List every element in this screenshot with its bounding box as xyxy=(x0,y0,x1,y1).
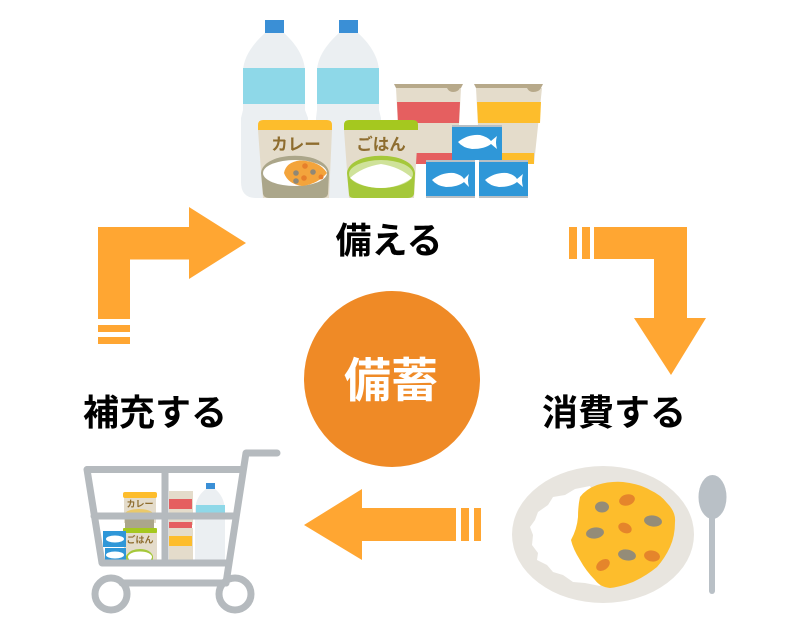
arrow: consume to replenish xyxy=(304,489,481,560)
icon: cup noodle red xyxy=(394,84,463,164)
label: curry: カレー xyxy=(271,135,321,154)
arrow: prepare to consume xyxy=(569,227,706,375)
icon: curry ingredients xyxy=(585,493,663,573)
icon: curry xyxy=(571,482,675,588)
icon: cart contents xyxy=(103,483,225,562)
heading: prepare: 備える xyxy=(336,220,442,261)
heading: replenish: 補充する xyxy=(83,392,227,433)
icon: water bottle right xyxy=(316,20,381,198)
illustration: shopping cart xyxy=(87,453,277,610)
illustration: emergency food and water xyxy=(241,20,543,198)
label: rice small: ごはん xyxy=(126,534,154,545)
label: stockpile: 備蓄 xyxy=(344,354,438,407)
icon: rice xyxy=(530,486,625,586)
icon: cart frame xyxy=(87,453,277,610)
heading: consume: 消費する xyxy=(542,392,686,433)
label: rice: ごはん xyxy=(356,134,406,154)
illustration: curry plate and spoon xyxy=(512,466,726,603)
icon: curry pack xyxy=(258,120,332,198)
center circle xyxy=(304,291,480,467)
arrow: replenish to prepare xyxy=(98,207,246,344)
icon: spoon xyxy=(698,475,726,594)
label: curry small: カレー xyxy=(126,499,154,509)
icon: water bottle left xyxy=(241,20,308,198)
icon: cup noodle yellow xyxy=(474,84,543,164)
icon: plate xyxy=(512,466,694,603)
icon: tin can bottom left xyxy=(426,160,475,198)
icon: tin can bottom right xyxy=(479,160,528,198)
icon: tin can top xyxy=(452,125,502,160)
icon: rice pack xyxy=(344,120,418,198)
